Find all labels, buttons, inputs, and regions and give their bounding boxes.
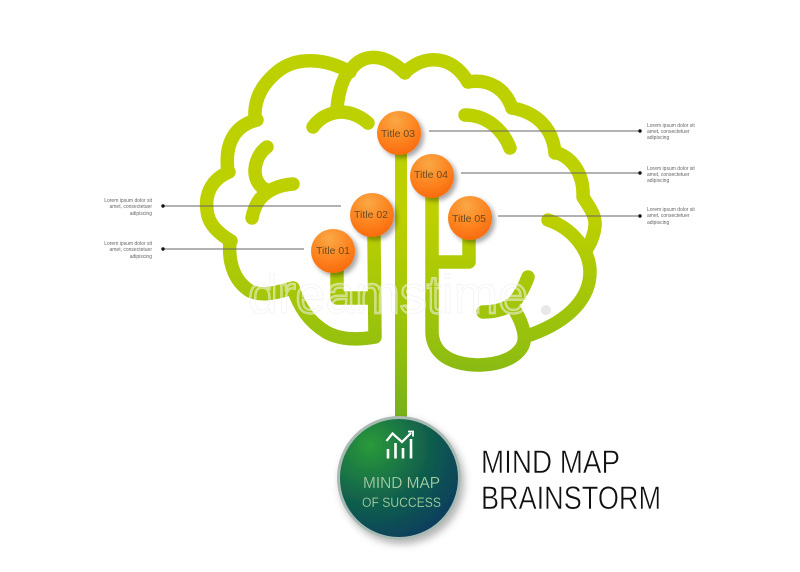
central badge xyxy=(338,418,460,538)
node: Title 01: Title 01 xyxy=(316,245,350,257)
badge text: MIND MAP xyxy=(363,475,440,492)
watermark: dreamstime xyxy=(248,265,528,325)
main stem xyxy=(395,133,407,419)
text block: Title 03 description: adipiscing xyxy=(647,135,669,141)
watermark: dreamstime xyxy=(248,265,528,325)
text block: Title 02 description: amet, consectetuer xyxy=(109,204,152,210)
badge text: OF SUCCESS xyxy=(362,495,441,510)
node: Title 03: Title 03 xyxy=(381,128,415,140)
badge text xyxy=(362,475,441,510)
node: Title 03 xyxy=(377,111,421,155)
text block: Title 02 description: Lorem ipsum dolor sit xyxy=(104,198,153,204)
text block: Title 04 description: Lorem ipsum dolor sit xyxy=(647,166,695,172)
text block: Title 05 description: adipiscing xyxy=(647,220,669,226)
text block: Title 02 description: adipiscing xyxy=(130,211,152,217)
node: Title 04 xyxy=(410,154,454,198)
text block: Title 05 description: amet, consectetuer xyxy=(647,213,690,219)
text block: Title 04 description: adipiscing xyxy=(647,178,669,184)
text block: Title 03 description: amet, consectetuer xyxy=(647,129,690,135)
text block: Title 03 description xyxy=(647,123,695,141)
node: Title 01 xyxy=(311,229,355,273)
text block: Title 01 description xyxy=(104,241,153,260)
text block: Title 04 description: amet, consectetuer xyxy=(647,172,690,178)
brain outline xyxy=(207,57,595,365)
text block: Title 01 description: amet, consectetuer xyxy=(109,247,152,253)
node: Title 05 xyxy=(448,196,492,240)
title: MIND MAP xyxy=(481,444,620,480)
node: Title 04: Title 04 xyxy=(414,169,448,181)
text block: Title 03 description: Lorem ipsum dolor sit xyxy=(647,123,695,129)
leader lines xyxy=(161,129,642,251)
icon: rising chart xyxy=(386,432,413,458)
node: Title 05: Title 05 xyxy=(452,213,486,225)
text block: Title 01 description: adipiscing xyxy=(130,254,152,260)
text block: Title 05 description: Lorem ipsum dolor sit xyxy=(647,207,695,213)
text block: Title 04 description xyxy=(647,166,695,184)
title xyxy=(481,444,661,516)
text block: Title 02 description xyxy=(104,198,153,217)
node: Title 02 xyxy=(350,193,394,237)
title: BRAINSTORM xyxy=(481,480,661,516)
text block: Title 01 description: Lorem ipsum dolor sit xyxy=(104,241,153,247)
text block: Title 05 description xyxy=(647,207,695,226)
node: Title 02: Title 02 xyxy=(354,209,388,221)
